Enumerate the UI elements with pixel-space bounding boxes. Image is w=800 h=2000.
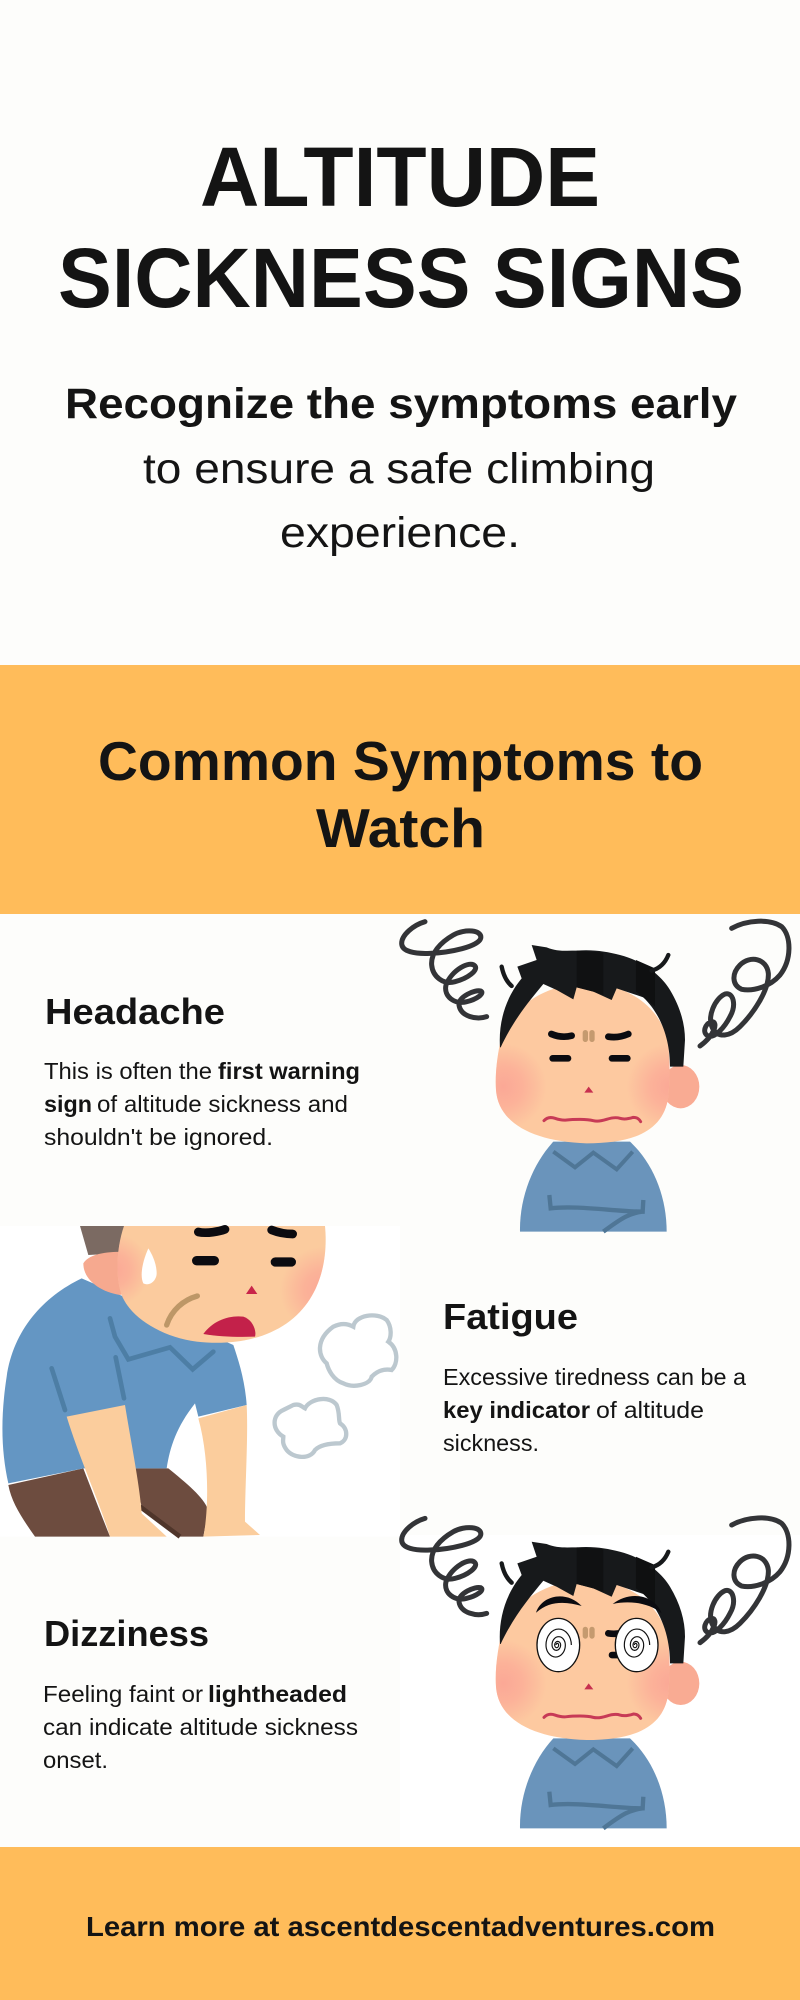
icon: dizzy boy with spiral eyes [400,1518,800,1847]
panel: fatigue text: Fatigue [443,1296,578,1337]
panel: fatigue text: Excessive tiredness can be a [443,1364,747,1390]
panel: dizziness text [43,1613,358,1773]
panel: fatigue text: key indicator [443,1397,590,1423]
panel: headache text: first warning [218,1058,360,1084]
panel: footer call to action: Learn more at ascentdescentadventures.com [86,1911,715,1942]
panel: headache text: sign [44,1091,92,1117]
icon: fatigued man breathing heavily [0,1226,400,1537]
panel: dizziness text: onset. [43,1747,108,1773]
panel: common symptoms heading band [0,665,800,914]
panel: footer call to action [0,1847,800,2000]
panel: headache text: Headache [45,991,225,1032]
icon: headache boy with swirls [402,921,789,1232]
panel: headache text: of altitude sickness and [97,1091,348,1117]
panel: common symptoms heading band: Common Symptoms to [98,730,703,792]
panel: headache text: This is often the [44,1058,212,1084]
panel: fatigue text [443,1296,747,1456]
subtitle: experience. [280,509,520,557]
subtitle [65,380,737,557]
title: ALTITUDE [200,130,600,224]
panel: fatigue text: of altitude [596,1397,704,1423]
panel: dizziness text: lightheaded [208,1681,347,1707]
panel: common symptoms heading band: Watch [316,797,485,859]
title [58,130,744,325]
panel: headache text: shouldn't be ignored. [44,1124,273,1150]
panel: dizziness text: Feeling faint or [43,1681,203,1707]
panel: fatigue text: sickness. [443,1430,539,1456]
subtitle: to ensure a safe climbing [143,445,655,493]
title: SICKNESS SIGNS [58,231,744,325]
panel: dizziness text: can indicate altitude sickness [43,1714,358,1740]
subtitle: Recognize the symptoms early [65,380,737,428]
panel: dizziness text: Dizziness [44,1613,209,1654]
panel: headache text [44,991,360,1150]
